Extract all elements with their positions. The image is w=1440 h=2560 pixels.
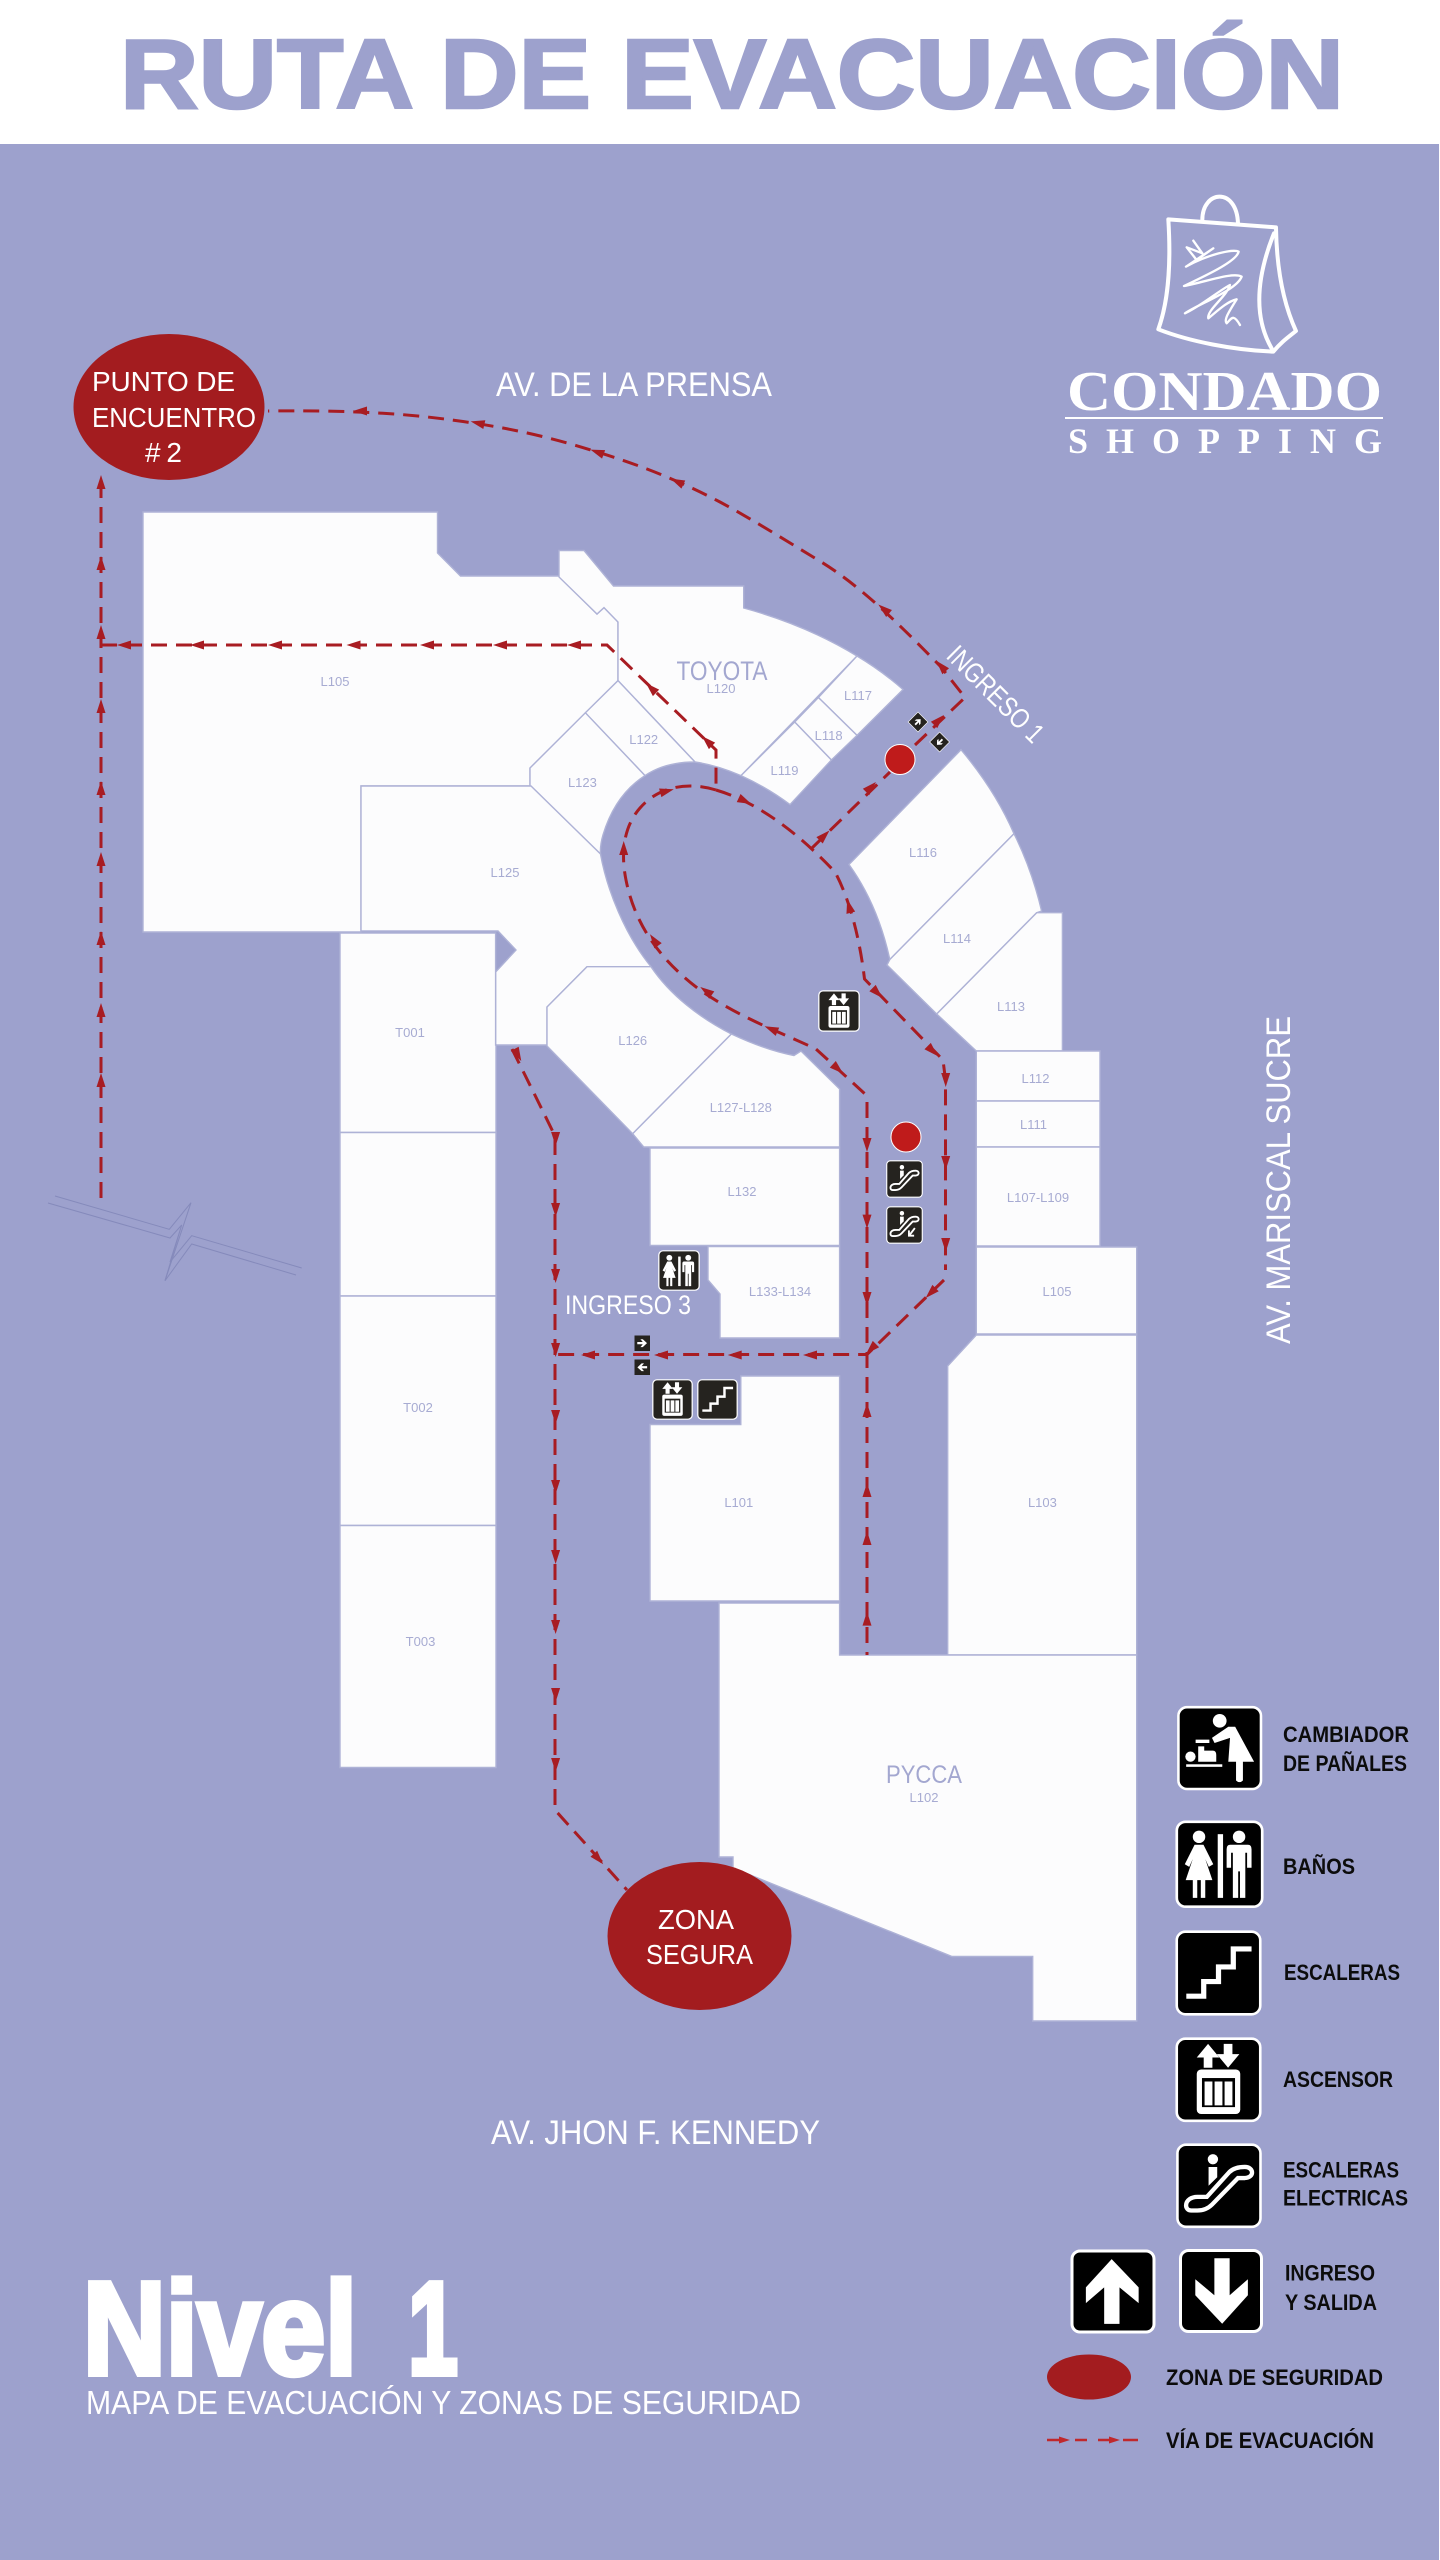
legend item: safety zone: ZONA DE SEGURIDAD <box>1166 2365 1383 2390</box>
street: Av. de la Prensa: AV. DE LA PRENSA <box>496 366 772 404</box>
meeting point 2 <box>74 334 264 480</box>
shop L116 <box>849 750 1014 960</box>
shop L105 large <box>143 512 618 932</box>
street: Av. Mariscal Sucre: AV. MARISCAL SUCRE <box>1260 1016 1298 1344</box>
icon: escalator down <box>887 1207 922 1243</box>
logo subtitle: SHOPPING <box>1068 421 1382 461</box>
shop L117 <box>818 656 903 735</box>
shop L127-L128 <box>633 1034 840 1147</box>
route direction arrows <box>96 406 950 1867</box>
legend item: changing table <box>1178 1707 1409 1789</box>
logo wordmark: CONDADO <box>1067 361 1382 423</box>
shop L103 <box>948 1335 1137 1655</box>
shop L120 Toyota: L120 <box>707 681 735 696</box>
shop L133-L134: L133-L134 <box>749 1284 811 1299</box>
safe zone: ZONA <box>658 1904 734 1935</box>
legend item: escalators <box>1177 2145 1408 2227</box>
level subtitle: MAPA DE EVACUACIÓN Y ZONAS DE SEGURIDAD <box>86 2384 801 2421</box>
legend item: escalators: ESCALERAS <box>1283 2158 1399 2182</box>
legend item: entrance and exit: Y SALIDA <box>1285 2290 1377 2315</box>
shop L122 <box>585 681 695 776</box>
safe zone <box>608 1862 792 2010</box>
shop L122: L122 <box>629 732 658 747</box>
shop unnamed tower <box>340 1132 496 1296</box>
shop L102 Pycca: PYCCA <box>886 1761 962 1789</box>
shop L119 <box>741 722 831 805</box>
shop L111 <box>976 1101 1100 1147</box>
legend item: safety zone <box>1047 2354 1383 2400</box>
shop L107-L109: L107-L109 <box>1007 1190 1069 1205</box>
meeting point 2: PUNTO DE <box>92 366 235 397</box>
shop L125: L125 <box>491 865 519 880</box>
road break mark <box>48 1196 302 1281</box>
shop L125 <box>361 786 651 1045</box>
icon: stairs west <box>698 1380 737 1419</box>
legend item: entrance and exit: INGRESO <box>1285 2260 1375 2286</box>
street: Av. Jhon F. Kennedy: AV. JHON F. KENNEDY <box>491 2114 820 2152</box>
shop L132 <box>650 1148 840 1246</box>
shop L105 east: L105 <box>1043 1284 1071 1299</box>
shop L112 <box>976 1051 1100 1101</box>
icon: restrooms <box>659 1251 699 1290</box>
legend item: stairs: ESCALERAS <box>1284 1960 1400 1985</box>
shop L114: L114 <box>943 931 971 946</box>
shop L102 Pycca <box>719 1603 1137 2021</box>
legend item: elevator: ASCENSOR <box>1283 2067 1393 2092</box>
level heading: Nivel <box>83 2255 357 2402</box>
shop L118: L118 <box>815 728 843 743</box>
safe zone: SEGURA <box>646 1939 753 1970</box>
legend item: evacuation route: VÍA DE EVACUACIÓN <box>1166 2428 1374 2453</box>
shop L117: L117 <box>844 688 872 703</box>
legend item: restrooms: BAÑOS <box>1283 1854 1355 1879</box>
shop L111: L111 <box>1020 1117 1047 1132</box>
icon: entrance 1 out arrow <box>930 732 949 752</box>
entrance label: Ingreso 1: INGRESO 1 <box>941 639 1050 749</box>
shop L118 <box>795 698 857 760</box>
shop L113 <box>937 913 1062 1051</box>
shop T003: T003 <box>406 1634 435 1649</box>
legend item: elevator <box>1177 2039 1393 2121</box>
shop L123 <box>530 713 645 854</box>
icon: entrance 1 in arrow <box>908 712 928 732</box>
shop L101 <box>650 1376 840 1601</box>
meeting point 2: # 2 <box>145 437 182 468</box>
icon: elevator central <box>819 991 859 1031</box>
shop L114 <box>887 834 1042 1014</box>
shop L133-L134 <box>708 1246 840 1338</box>
shop T001: T001 <box>395 1025 425 1040</box>
shop T002: T002 <box>403 1400 433 1415</box>
legend item: escalators: ELECTRICAS <box>1283 2186 1408 2210</box>
shop L103: L103 <box>1028 1495 1057 1510</box>
shop T003 <box>340 1526 496 1768</box>
shop L120 Toyota <box>559 550 857 776</box>
shop L119: L119 <box>771 763 798 778</box>
shop L112: L112 <box>1022 1071 1049 1086</box>
shop L127-L128: L127-L128 <box>710 1100 772 1115</box>
shop L102 Pycca: L102 <box>910 1790 938 1805</box>
red point north <box>885 744 915 774</box>
icon: entrance 3 in arrow <box>634 1336 650 1351</box>
meeting point 2: ENCUENTRO <box>92 402 256 433</box>
shop L132: L132 <box>728 1184 756 1199</box>
entrance label: Ingreso 3: INGRESO 3 <box>565 1290 691 1320</box>
street labels <box>491 366 1298 2152</box>
shop L105 east <box>976 1247 1137 1334</box>
level heading: 1 <box>408 2255 458 2402</box>
floor plan shops <box>143 512 1137 2021</box>
shop L126: L126 <box>618 1033 647 1048</box>
logo: Condado Shopping <box>1065 197 1383 461</box>
shop L126 <box>547 967 731 1134</box>
shop L113: L113 <box>997 999 1025 1014</box>
legend item: restrooms <box>1177 1822 1355 1907</box>
icon: entrance 3 out arrow <box>634 1360 650 1375</box>
shop L120 Toyota: TOYOTA <box>676 656 768 686</box>
shop T001 <box>340 933 496 1132</box>
shop T002 <box>340 1296 496 1526</box>
red point south <box>891 1122 921 1152</box>
shop L107-L109 <box>976 1147 1100 1246</box>
map icons <box>634 712 949 1419</box>
shop L105 large: L105 <box>321 674 349 689</box>
legend item: evacuation route <box>1047 2428 1374 2453</box>
shop L116: L116 <box>909 845 937 860</box>
icon: shopping bag <box>1158 197 1296 352</box>
legend item: entrance and exit <box>1072 2250 1377 2332</box>
legend <box>1047 1707 1409 2453</box>
legend item: changing table: DE PAÑALES <box>1283 1751 1407 1776</box>
icon: escalator up <box>887 1161 922 1197</box>
legend item: changing table: CAMBIADOR <box>1283 1722 1409 1747</box>
title: RUTA DE EVACUACIÓN <box>120 19 1344 129</box>
evacuation routes <box>96 406 965 1890</box>
route lines <box>101 411 965 1890</box>
shop L101: L101 <box>724 1495 753 1510</box>
icon: elevator west <box>653 1380 692 1419</box>
shop L123: L123 <box>568 775 597 790</box>
legend item: stairs <box>1177 1932 1400 2014</box>
